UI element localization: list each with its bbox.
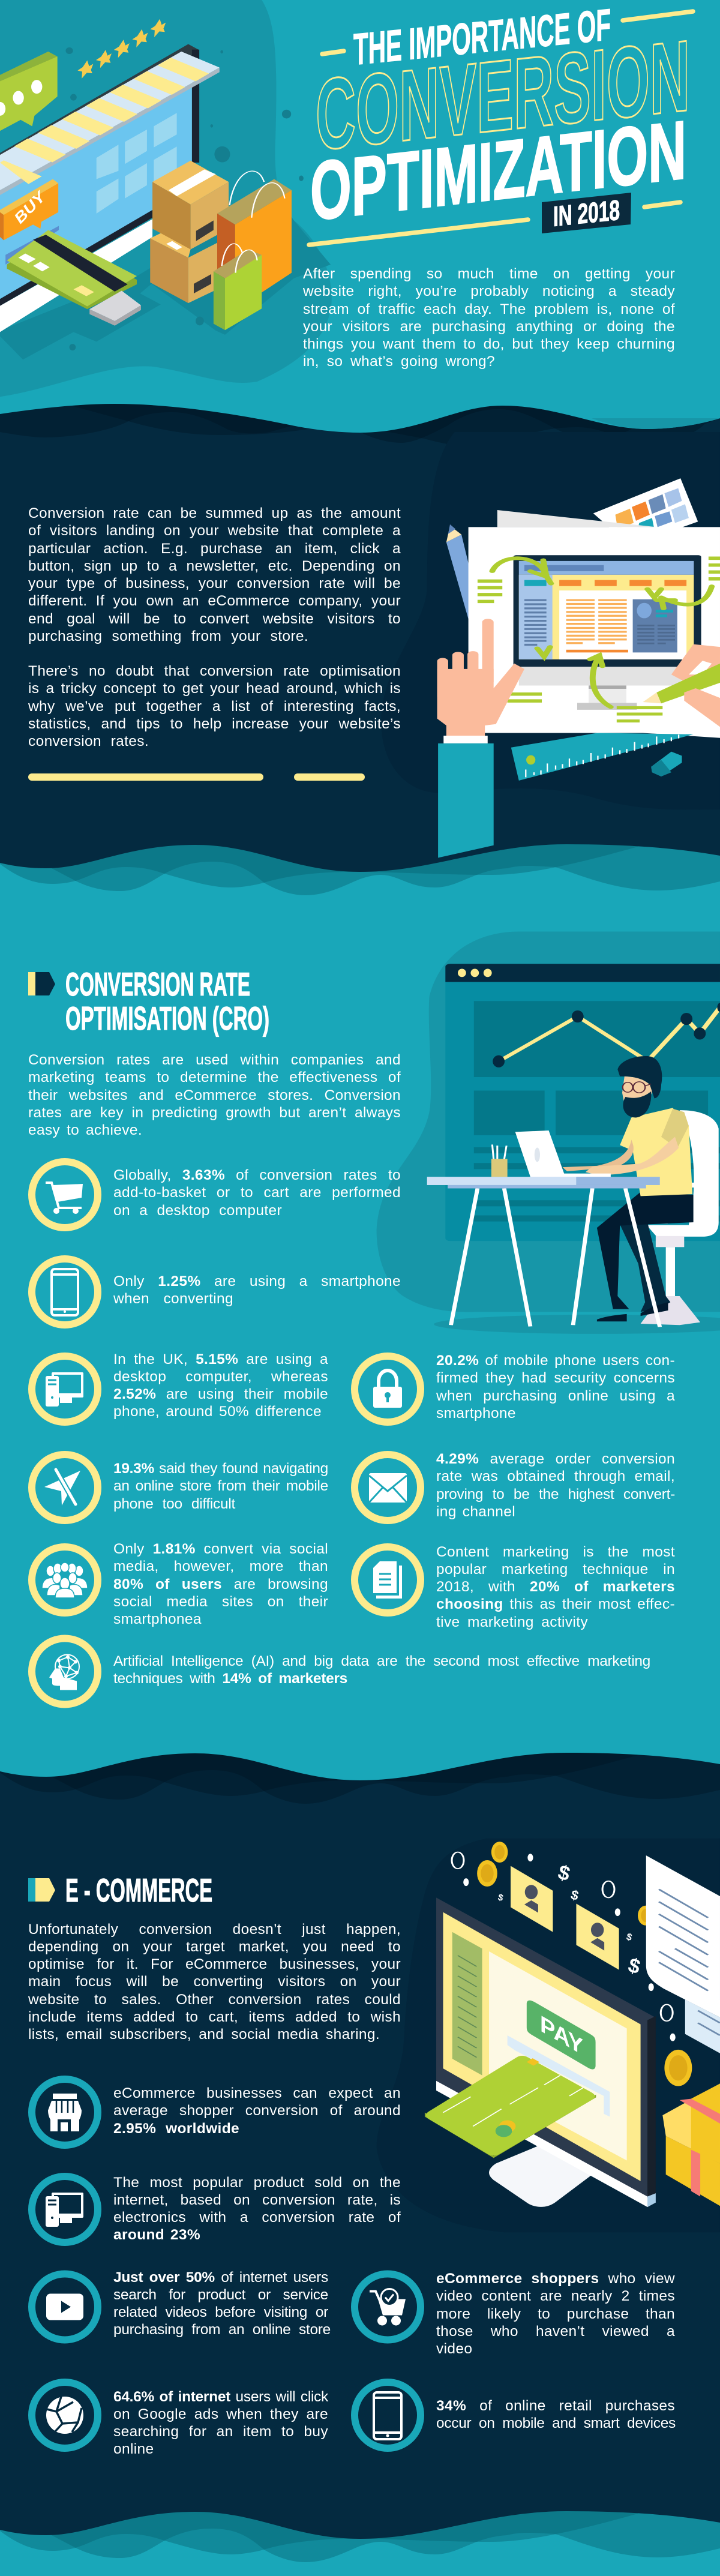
- dollar signs: [497, 1861, 643, 1979]
- heading marker: [28, 1878, 55, 1902]
- green bag: [222, 244, 244, 266]
- stat: social media: 80% of users are browsing: [113, 1576, 328, 1593]
- stat icon: AI head: [32, 1638, 98, 1704]
- e-commerce intro paragraph: [28, 1921, 401, 2043]
- buy tag label: BUY: [11, 187, 50, 227]
- dollar signs: $: [556, 1861, 572, 1886]
- green annotation arrows: [492, 558, 712, 707]
- stat: mobile purchases: occur on mobile and smart devices: [436, 2415, 676, 2431]
- CRO intro paragraph: rates are key in predicting growth but aren’t always: [28, 1105, 401, 1121]
- second definition paragraph: conversion rates.: [28, 733, 149, 749]
- desk legs: [451, 1188, 592, 1327]
- pay button label: PAY: [540, 2010, 583, 2061]
- receipt document: [646, 1855, 720, 2017]
- stat icon: smartphone: [355, 2382, 421, 2448]
- parcels: [150, 238, 188, 303]
- stat: UK desktop vs mobile: desktop computer, whereas: [113, 1369, 328, 1385]
- floating dots and rings: [452, 1852, 673, 2021]
- dollar signs: $: [625, 1932, 633, 1943]
- section heading: conversion rate optimisation: [28, 965, 269, 1037]
- definition paragraph: of visitors landing on your website that complete a: [28, 523, 401, 539]
- stat: average shopper conversion: 2.95% worldwide: [113, 2121, 239, 2136]
- stat icon: crowd of people: [32, 1547, 98, 1613]
- stat: mobile navigation difficulty: an online store from their mobile: [113, 1478, 328, 1494]
- eraser: [651, 752, 682, 776]
- stat: mobile navigation difficulty: phone too difficult: [113, 1495, 235, 1512]
- stat: mobile purchases: [436, 2398, 676, 2431]
- coins: [477, 1842, 692, 2086]
- stat: desktop add to basket: on a desktop computer: [113, 1202, 282, 1218]
- second definition paragraph: why we’ve put together a list of interesting facts,: [28, 698, 401, 714]
- stat: social media: smartphonea: [113, 1611, 202, 1627]
- person arms: [562, 1139, 634, 1171]
- stat: UK desktop vs mobile: phone, around 50% difference: [113, 1404, 322, 1420]
- stat: smartphone converting: when converting: [113, 1291, 233, 1307]
- stat: mobile security concerns: firmed they had security concerns: [436, 1370, 675, 1386]
- CRO intro paragraph: marketing teams to determine the effectiveness of: [28, 1069, 401, 1085]
- stat: product videos: search for product or service: [113, 2287, 328, 2303]
- desk top: [427, 1177, 576, 1185]
- e-commerce intro paragraph: depending on your target market, you need to: [28, 1939, 401, 1955]
- stat: desktop add to basket: Globally, 3.63% of conversion rates to: [113, 1167, 401, 1183]
- stat: video viewers: more likely to purchase than: [436, 2305, 675, 2322]
- stat: email conversion: rate was obtained through email,: [436, 1468, 675, 1485]
- stat: product videos: related videos before visiting or: [113, 2304, 328, 2320]
- stat: content marketing: Content marketing is the most: [436, 1543, 675, 1560]
- stat: mobile purchases: 34% of online retail purchases: [436, 2398, 675, 2414]
- person shirt: [620, 1108, 692, 1196]
- stat: email conversion: ing channel: [436, 1504, 515, 1520]
- stat: video viewers: video: [436, 2341, 472, 2357]
- panel illustration: analyst at desk with chart browser: [377, 932, 720, 1334]
- ruler: [511, 733, 694, 781]
- stat: average shopper conversion: eCommerce businesses can expect an: [113, 2085, 401, 2101]
- intro paragraph: website right, you’re probably noticing a steady: [303, 283, 675, 299]
- definition paragraph: purchasing something from your store.: [28, 628, 308, 644]
- stat: electronics: around 23%: [113, 2227, 200, 2243]
- second definition paragraph: is a tricky concept to get your head around, which is: [28, 680, 401, 697]
- buy tag: [0, 179, 58, 218]
- line chart: [499, 1007, 720, 1061]
- stat icon: desktop computer: [32, 2176, 98, 2242]
- stat: UK desktop vs mobile: In the UK, 5.15% are using a: [113, 1351, 328, 1367]
- stat: mobile navigation difficulty: [113, 1461, 328, 1512]
- stat icon: globe network: [32, 2382, 98, 2448]
- stat: video viewers: eCommerce shoppers who view: [436, 2271, 675, 2287]
- stat: google ads: online: [113, 2441, 154, 2457]
- stat: social media: Only 1.81% convert via social: [113, 1541, 328, 1557]
- left hand and sleeve: [437, 619, 524, 736]
- stat: electronics: electronics with a conversion rate of: [113, 2209, 401, 2226]
- panel illustration: isometric payment terminal: [377, 1839, 720, 2232]
- stat: social media: [113, 1541, 328, 1627]
- monitor body: [436, 2081, 656, 2207]
- stat: mobile security concerns: when purchasing online using a: [436, 1387, 675, 1404]
- stat: google ads: searching for an item to buy: [113, 2424, 328, 2440]
- profile cards: [511, 1866, 553, 1932]
- heading marker: [28, 972, 55, 995]
- laptop: [515, 1130, 565, 1177]
- awning: [0, 68, 220, 195]
- credit card: [5, 226, 59, 265]
- intro paragraph: things you want them to do, but they keep churning: [303, 336, 675, 352]
- chair: [647, 1110, 719, 1237]
- card slot: [508, 2035, 610, 2116]
- e-commerce intro paragraph: lists, email subscribers, and social media sharing.: [28, 2026, 380, 2043]
- heading text: E - COMMERCE: [65, 1872, 212, 1909]
- heading text: CONVERSION RATE: [65, 965, 250, 1003]
- stat icon: desktop computer: [32, 1356, 98, 1422]
- stat: electronics: [113, 2175, 401, 2243]
- CRO intro paragraph: easy to achieve.: [28, 1122, 142, 1138]
- intro paragraph: your visitors are purchasing anything or doing the: [303, 319, 675, 335]
- stat: social media: social media sites on their: [113, 1594, 328, 1610]
- section heading: e-commerce: [28, 1872, 212, 1909]
- definition paragraph: button, sign up to a newsletter, etc. Depending on: [28, 558, 401, 574]
- intro paragraph: in, so what’s going wrong?: [303, 353, 495, 370]
- stat: video viewers: video content are nearly 2 times: [436, 2288, 675, 2304]
- paper sheet: [469, 527, 720, 738]
- stat: electronics: The most popular product sold on the: [113, 2175, 401, 2191]
- stat: social media: media, however, more than: [113, 1558, 328, 1575]
- stat: AI and big data: techniques with 14% of marketers: [113, 1671, 347, 1687]
- definition paragraph: different. If you own an eCommerce company, your: [28, 593, 401, 609]
- stat: product videos: [113, 2269, 331, 2338]
- decorative bars: [28, 773, 365, 781]
- main title: [309, 0, 693, 245]
- stat: email conversion: 4.29% average order conversion: [436, 1451, 675, 1467]
- green payment card: [425, 2095, 596, 2158]
- stat icon: smartphone: [32, 1259, 98, 1325]
- person head: [622, 1076, 652, 1112]
- stat: content marketing: popular marketing technique in: [436, 1561, 675, 1578]
- stat: desktop add to basket: [113, 1167, 401, 1218]
- e-commerce intro paragraph: main focus will be converting visitors on your: [28, 1974, 401, 1990]
- stat: google ads: 64.6% of internet users will click: [113, 2388, 328, 2405]
- pay button: [527, 2001, 596, 2070]
- year label: IN 2018: [553, 194, 620, 232]
- pencil: [446, 535, 470, 622]
- stat: content marketing: [436, 1543, 675, 1630]
- stat: mobile security concerns: 20.2% of mobile phone users con-: [436, 1353, 675, 1369]
- rating stars: [77, 19, 166, 79]
- stat: average shopper conversion: [113, 2085, 401, 2136]
- pen cup: [492, 1144, 506, 1159]
- stat: content marketing: 2018, with 20% of marketers: [436, 1579, 675, 1595]
- e-commerce intro paragraph: website to sales. Other conversion rates could: [28, 1992, 401, 2008]
- definition paragraph: particular action. E.g. purchase an item, click a: [28, 540, 401, 557]
- intro paragraph: After spending so much time on getting your: [303, 266, 675, 282]
- stat: UK desktop vs mobile: [113, 1351, 328, 1420]
- dollar signs: $: [569, 1887, 580, 1903]
- stat icon: padlock: [355, 1356, 421, 1422]
- stat icon: envelope: [355, 1455, 421, 1521]
- stat icon: video play: [32, 2274, 98, 2340]
- stat icon: cart with check: [355, 2274, 421, 2340]
- second definition paragraph: There’s no doubt that conversion rate optimisation: [28, 663, 401, 679]
- browser window: [445, 964, 720, 1241]
- stat: content marketing: choosing this as their most effec-: [436, 1596, 675, 1612]
- CRO intro paragraph: Conversion rates are used within companies and: [28, 1052, 401, 1068]
- second definition paragraph: statistics, and tips to help increase your website’s: [28, 716, 401, 732]
- hero illustration: online shop monitor with parcels and bags: [0, 0, 332, 397]
- definition paragraph: your type of business, your conversion rate will be: [28, 575, 401, 592]
- stat: smartphone converting: [113, 1273, 401, 1307]
- stat icon: shop: [32, 2079, 98, 2145]
- stat: smartphone converting: Only 1.25% are using a smartphone: [113, 1273, 401, 1290]
- definition paragraph: [28, 505, 401, 644]
- person trousers: [617, 1219, 670, 1312]
- e-commerce intro paragraph: include items added to cart, items added to wish: [28, 2009, 401, 2025]
- right hand with green pencil: [671, 644, 720, 682]
- stat: email conversion: [436, 1451, 675, 1520]
- year badge: [542, 193, 631, 233]
- stat icon: cart: [32, 1162, 98, 1228]
- definition paragraph: Conversion rate can be summed up as the amount: [28, 505, 401, 521]
- gift box: [666, 2136, 720, 2206]
- stat: AI and big data: [113, 1653, 650, 1687]
- stat: average shopper conversion: average shopper conversion of around: [113, 2103, 401, 2119]
- heading text line two: OPTIMISATION (CRO): [65, 1000, 269, 1037]
- stat: UK desktop vs mobile: 2.52% are using their mobile: [113, 1386, 328, 1402]
- stat: desktop add to basket: add-to-basket or to cart are performed: [113, 1184, 401, 1201]
- e-commerce intro paragraph: Unfortunately conversion doesn’t just happen,: [28, 1921, 401, 1938]
- stat icon: documents: [355, 1547, 421, 1613]
- CRO intro paragraph: their websites and eCommerce stores. Conversion: [28, 1087, 401, 1103]
- stat: electronics: internet, based on conversion rate, is: [113, 2192, 401, 2208]
- title dashes: [309, 11, 693, 245]
- panel illustration: designing a web page on paper: [381, 432, 720, 857]
- card reader slot: [89, 305, 141, 326]
- monitor screen: [0, 62, 193, 299]
- dollar signs: $: [497, 1892, 505, 1903]
- colour swatch card: [593, 478, 698, 529]
- stat: mobile security concerns: [436, 1353, 675, 1422]
- stat: google ads: [113, 2388, 329, 2457]
- dollar signs: $: [626, 1954, 643, 1979]
- stat: email conversion: proving to be the highest convert-: [436, 1486, 675, 1503]
- chat bubble: [0, 52, 58, 85]
- stat: video viewers: [436, 2271, 675, 2357]
- stat: google ads: on Google ads when they are: [113, 2406, 328, 2422]
- web page mockup: [514, 555, 701, 667]
- orange bag: [230, 171, 264, 205]
- second definition paragraph: [28, 663, 401, 749]
- stat: mobile navigation difficulty: 19.3% said they found navigating: [113, 1461, 328, 1477]
- definition paragraph: end goal will be to convert website visitors to: [28, 611, 401, 626]
- stat: content marketing: tive marketing activity: [436, 1614, 588, 1630]
- stat icon: navigation arrow crossed out: [32, 1455, 98, 1521]
- intro paragraph: stream of traffic each day. The problem is, none of: [303, 301, 675, 317]
- stat: mobile security concerns: smartphone: [436, 1405, 516, 1422]
- stat: product videos: Just over 50% of internet users: [113, 2269, 328, 2286]
- e-commerce intro paragraph: optimise for it. For eCommerce businesses, your: [28, 1956, 401, 1972]
- monitor stand: [489, 2145, 592, 2207]
- stat: AI and big data: Artificial Intelligence (AI) and big data are the second most effective marketing: [113, 1653, 650, 1669]
- sidebar panel: [452, 1932, 482, 2076]
- intro paragraph: [303, 266, 675, 370]
- stat: product videos: purchasing from an online store: [113, 2322, 331, 2338]
- stat: video viewers: those who haven’t viewed a: [436, 2323, 675, 2340]
- floor shadow: [434, 1315, 720, 1334]
- CRO intro paragraph: [28, 1052, 401, 1138]
